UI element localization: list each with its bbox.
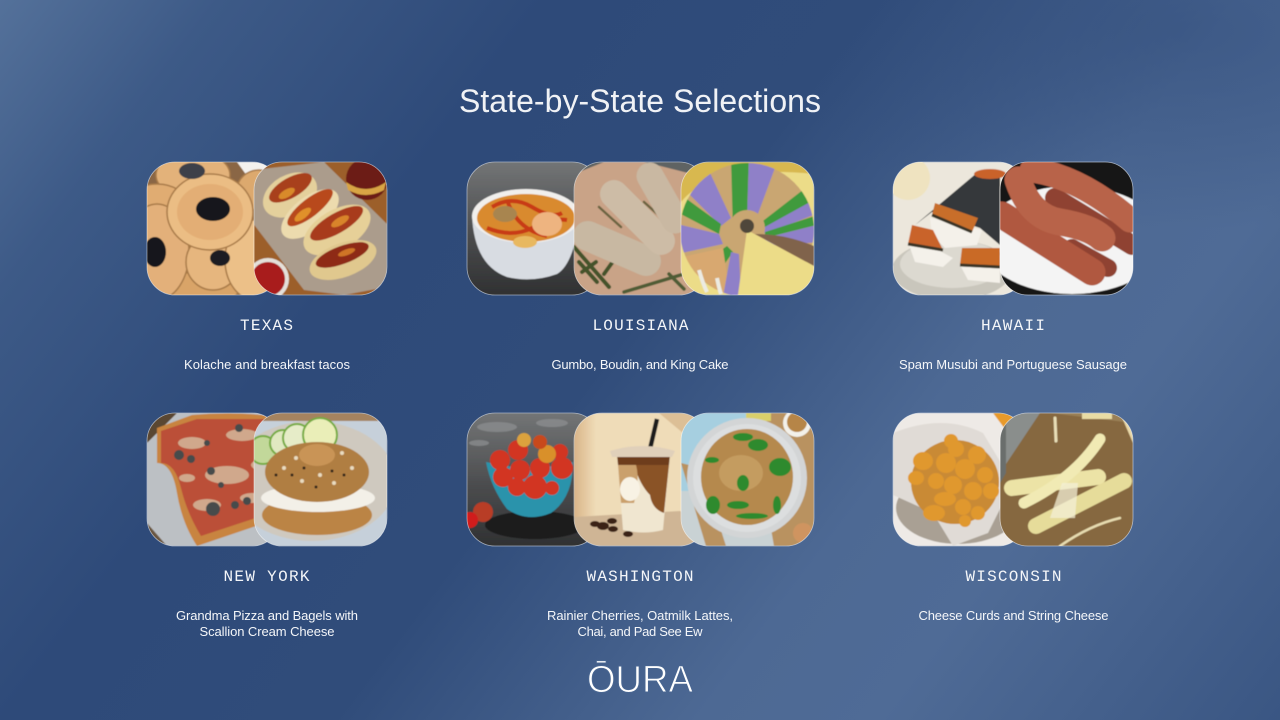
infographic canvas [146, 88, 1134, 692]
state name: Washington: WASHINGTON [586, 568, 694, 586]
state name: New York: NEW YORK [224, 568, 310, 586]
description: Texas: Kolache and breakfast tacos [184, 357, 350, 372]
panel: Washington: Chai, and Pad See Ew [578, 624, 703, 639]
description: Washington: Rainier Cherries, Oatmilk Lattes, [547, 608, 733, 623]
photo: cheese curds [893, 413, 1026, 546]
title: State-by-State Selections [459, 83, 821, 119]
state name: Louisiana: LOUISIANA [592, 317, 689, 335]
photo: portuguese sausage [1000, 162, 1134, 296]
photo: spam musubi [892, 162, 1014, 296]
panel: Texas [146, 162, 388, 369]
state name: Texas: TEXAS [240, 317, 293, 335]
panel: Louisiana [467, 155, 821, 372]
photo: pad see ew [681, 409, 814, 546]
photo: kolache [146, 162, 268, 296]
logo: Oura: ŌURA [587, 659, 694, 701]
photo: gumbo [467, 162, 600, 295]
panel: Hawaii [892, 162, 1134, 372]
description: Hawaii: Spam Musubi and Portuguese Sausage [899, 357, 1127, 372]
description: Louisiana: Gumbo, Boudin, and King Cake [552, 357, 728, 372]
panel: New York: Scallion Cream Cheese [200, 624, 334, 639]
panel: New York [147, 413, 396, 639]
photo: rainier cherries [466, 412, 588, 546]
photo: boudin [574, 162, 707, 295]
state name: Hawaii: HAWAII [981, 317, 1045, 335]
description: Wisconsin: Cheese Curds and String Cheese [918, 608, 1108, 623]
photo: breakfast tacos [254, 162, 388, 296]
photo: grandma pizza [147, 413, 280, 546]
photo: king cake [680, 162, 814, 296]
description: New York: Grandma Pizza and Bagels with [176, 608, 358, 623]
panel: Wisconsin [893, 413, 1133, 623]
photo: string cheese [1000, 413, 1133, 546]
photo: bagel with scallion cream cheese [254, 412, 388, 546]
state name: Wisconsin: WISCONSIN [966, 568, 1062, 586]
photo: oatmilk latte [574, 413, 707, 546]
panel: Washington [462, 409, 814, 639]
